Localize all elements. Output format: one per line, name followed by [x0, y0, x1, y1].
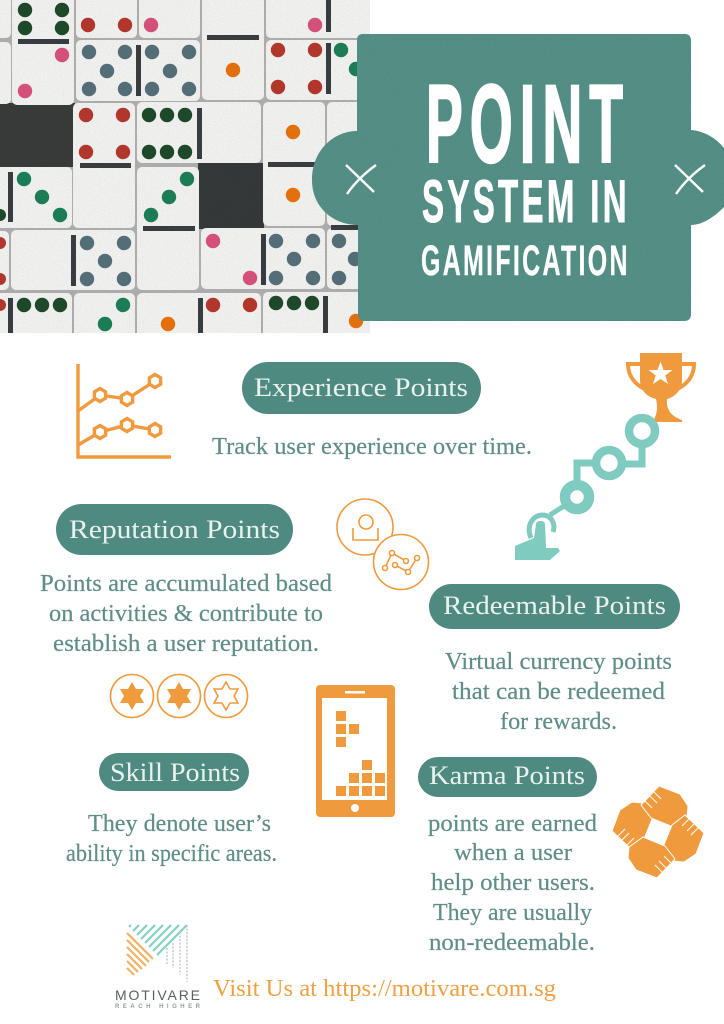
title text: POINT: POINT: [426, 63, 623, 186]
icon: right cross: [675, 165, 705, 194]
icon: teal progress path with hand: [515, 418, 655, 560]
text: redeemable description: for rewards.: [500, 709, 617, 735]
text: reputation description: establish a user reputation.: [53, 631, 319, 657]
text: website link: Visit Us at https://motivare.com.sg: [213, 976, 556, 1002]
text: redeemable description: Virtual currency points: [445, 649, 672, 675]
text: karma description: They are usually: [433, 900, 592, 926]
pill: Skill Points: Skill Points: [110, 758, 240, 787]
text: karma description: points are earned: [428, 811, 597, 837]
pill: Experience Points: [242, 362, 481, 414]
pill: Karma Points: [418, 757, 597, 797]
icon: two outline circles: [337, 499, 428, 590]
title badge: [312, 34, 724, 321]
text: reputation description: on activities & contribute to: [49, 601, 323, 627]
pill: Karma Points: Karma Points: [429, 761, 585, 790]
pill: Reputation Points: [56, 504, 293, 555]
text: reputation description: [40, 571, 332, 657]
text: skill description: [66, 811, 277, 867]
pill: Redeemable Points: Redeemable Points: [443, 591, 666, 620]
logo: Motivare: MOTIVARE: [115, 987, 200, 1003]
icon: four linked hands: [612, 786, 704, 878]
text: karma description: help other users.: [431, 870, 595, 896]
logo: Motivare: [115, 925, 201, 1010]
text: skill description: ability in specific areas.: [66, 841, 277, 867]
pill: Experience Points: Experience Points: [254, 373, 468, 402]
pill: Reputation Points: Reputation Points: [69, 515, 280, 544]
icon: smartphone with blocks: [316, 685, 395, 817]
text: redeemable description: [445, 649, 672, 735]
icon: left cross: [346, 165, 376, 194]
logo: Motivare: REACH HIGHER: [115, 1004, 201, 1010]
text: experience description: Track user experience over time.: [212, 434, 532, 460]
photo: domino tiles: [0, 0, 377, 343]
text: reputation description: Points are accumulated based: [40, 571, 332, 597]
title text: GAMIFICATION: GAMIFICATION: [421, 237, 627, 285]
pill: Skill Points: [99, 753, 249, 791]
icon: trophy: [628, 353, 694, 422]
text: karma description: when a user: [454, 840, 572, 866]
icon: line chart: [78, 364, 171, 457]
text: karma description: [428, 811, 597, 956]
text: redeemable description: that can be redeemed: [452, 679, 665, 705]
title text: SYSTEM IN: SYSTEM IN: [422, 169, 627, 236]
text: karma description: non-redeemable.: [429, 930, 595, 956]
pill: Redeemable Points: [429, 584, 680, 629]
icon: three star ratings: [110, 674, 248, 718]
text: skill description: They denote user’s: [88, 811, 271, 837]
